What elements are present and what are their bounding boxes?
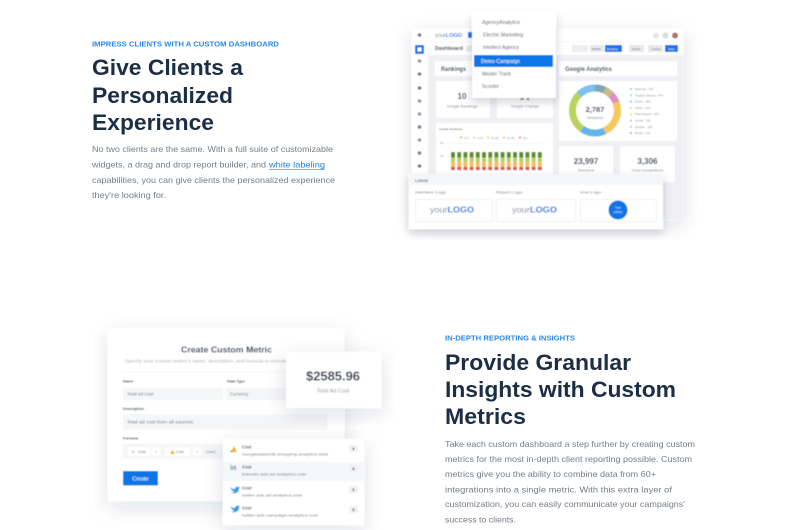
- create custom metric form: Name: [123, 380, 133, 384]
- create custom metric form: Cost: [176, 450, 185, 454]
- sessions donut chart card: [559, 81, 677, 141]
- legend: Other - 210: [635, 106, 651, 110]
- legend: Referral - 310: [635, 87, 654, 91]
- row: linkedin: linkedin-ads.ad-analytics.cost: [242, 472, 307, 476]
- create custom metric form: Data Type: [227, 380, 245, 384]
- donut chart: [572, 88, 618, 133]
- paragraph: custom metrics: metrics give you the ability to combine data from 60+: [445, 469, 656, 479]
- rankings header: Rankings: [441, 67, 467, 73]
- top bar: yourLOGO: [435, 33, 462, 39]
- paragraph: custom metrics: metrics for the most in-depth client reporting possible. Custom: [445, 454, 692, 464]
- google rankings bar chart: 25: [440, 141, 444, 145]
- row: linkedin: $: [352, 466, 355, 471]
- row: twitter campaign analytics: $: [352, 507, 355, 512]
- legend: Direct - 384: [635, 100, 651, 104]
- row: twitter campaign analytics: twitter-ads.campaign-analytics.cost: [242, 514, 319, 518]
- create button: [123, 471, 158, 486]
- heading: provide granular insights: [445, 350, 676, 429]
- google rankings bar chart: 51+: [523, 136, 528, 140]
- create custom metric form: b: [132, 449, 135, 454]
- google rankings bar chart: 4-10: [477, 136, 483, 140]
- row: linkedin: Cost: [242, 464, 252, 470]
- heading: provide granular insights: Metrics: [445, 404, 526, 429]
- paragraph: personalized experience: widgets, a drag and drop report builder, and: [91, 160, 266, 170]
- logos panel: LOGOS: [415, 179, 429, 183]
- section: personalized experience text: [91, 40, 335, 200]
- paragraph: custom metrics: success to clients.: [445, 514, 516, 524]
- heading: give clients a personalized experience: Experience: [92, 110, 214, 135]
- create custom metric form: Description: [123, 407, 145, 411]
- paragraph: custom metrics: [445, 439, 695, 524]
- create custom metric form: [108, 328, 344, 501]
- create custom metric form: +: [155, 449, 158, 454]
- paragraph: personalized experience: they're looking for.: [92, 190, 166, 200]
- google analytics header: Google Analytics: [565, 67, 613, 73]
- google rankings bar chart: 1-3: [464, 136, 469, 140]
- account dropdown: Scooter: [482, 84, 499, 90]
- paragraph: custom metrics: Take each custom dashboard a step further by creating custom: [445, 439, 695, 449]
- google rankings bar chart: Google Rankings: [439, 127, 463, 131]
- heading: provide granular insights: Insights with Custom: [445, 377, 676, 402]
- total ad cost callout: Total Ad Cost: [317, 388, 350, 394]
- paragraph: personalized experience: [91, 144, 335, 200]
- google rankings stat: 10: [458, 92, 467, 101]
- sessions stat: Sessions: [578, 168, 594, 172]
- heading: give clients a personalized experience: Personalized: [92, 83, 233, 108]
- google rankings stat: Google Rankings: [447, 104, 477, 108]
- goal completions stat: 3,306: [637, 157, 658, 166]
- google rankings stat: [436, 81, 490, 118]
- rankings header: [435, 61, 553, 76]
- google analytics header: [559, 61, 677, 76]
- total ad cost callout: $2585.96: [306, 370, 360, 384]
- account dropdown: Intellect Agency: [483, 45, 520, 51]
- row: twitter campaign analytics: [230, 506, 358, 518]
- google change stat: Google Change: [511, 104, 540, 108]
- top bar: Dashboard: [435, 46, 463, 52]
- logos panel: [409, 174, 663, 229]
- sidebar: [412, 29, 428, 175]
- row: linkedin: in: [230, 465, 236, 472]
- legend: Social - 118: [635, 118, 651, 122]
- top bar: Cancel: [651, 47, 661, 51]
- row: google ads: $: [352, 446, 355, 451]
- top bar: Mobile: [592, 47, 601, 51]
- logos panel: your LOGO: [512, 206, 557, 214]
- google change stat: [497, 81, 553, 118]
- section: granular insights text: [445, 334, 695, 524]
- row: twitter ad analytics: [230, 486, 358, 498]
- paragraph: personalized experience: capabilities, you can give clients the personalized experience: [92, 175, 335, 185]
- create custom metric form: Cost: [138, 450, 147, 454]
- logos panel: Icon Logo: [580, 190, 602, 194]
- account dropdown: [472, 12, 556, 98]
- sessions donut chart card: 2,787: [586, 105, 604, 114]
- create custom metric form: +: [196, 449, 199, 454]
- stacked bars: [451, 152, 542, 170]
- sessions stat: [559, 146, 613, 182]
- create custom metric form: Total Ad Cost: [127, 392, 154, 396]
- top bar: Delete: [632, 47, 641, 51]
- create custom metric form: Formula: [123, 436, 139, 440]
- legend: Paid Search - 312: [635, 112, 659, 116]
- top bar: Desktop: [607, 47, 618, 51]
- row: twitter campaign analytics: Cost: [242, 506, 252, 510]
- sessions stat: 23,997: [574, 157, 599, 166]
- logos panel: Your: [615, 206, 621, 210]
- heading: provide granular insights: Provide Granular: [445, 350, 631, 375]
- legend: [630, 87, 664, 135]
- account dropdown: Master Track: [482, 72, 511, 78]
- dashboard mockup: [409, 12, 683, 229]
- dashboard window: [412, 29, 683, 220]
- total ad cost callout: [286, 352, 381, 408]
- google rankings bar chart: 21-50: [507, 136, 515, 140]
- row: google ads: Googleadwords.shopping-analytics.total: [242, 452, 328, 456]
- goal completions stat: Goal Completions: [632, 168, 663, 172]
- row: google ads: Cost: [242, 444, 252, 450]
- paragraph: personalized experience: white labeling: [268, 160, 325, 170]
- create custom metric form: Currency: [230, 392, 249, 396]
- row: google ads: [230, 444, 358, 456]
- top bar: [412, 29, 683, 55]
- row: twitter ad analytics: twitter-ads.ad-analytics.cost: [242, 494, 303, 498]
- account dropdown: Electric Marketing: [483, 32, 523, 38]
- row: twitter ad analytics: $: [352, 487, 355, 492]
- goal completions stat: [620, 146, 675, 182]
- account dropdown: AgencyAnalytics: [482, 20, 521, 26]
- create custom metric form: Create Custom Metric: [181, 344, 272, 354]
- eyebrow: impress clients: IMPRESS CLIENTS WITH A CUSTOM DASHBOARD: [92, 40, 280, 48]
- legend: Email - 122: [635, 131, 651, 135]
- legend: Display - 181: [635, 125, 653, 129]
- logos panel: Report Logo: [496, 190, 523, 194]
- custom metric mockup: [108, 328, 381, 525]
- legend: Organic Search - 870: [635, 93, 664, 97]
- create custom metric form: Total ad cost from all sources: [127, 420, 194, 424]
- create custom metric form: Cost |: [206, 450, 216, 454]
- eyebrow: in-depth reporting: IN-DEPTH REPORTING & INSIGHTS: [445, 334, 575, 342]
- heading: give clients a personalized experience: [92, 55, 244, 135]
- row: linkedin: [230, 464, 358, 476]
- google rankings bar chart: [436, 123, 553, 175]
- account dropdown: Demo Campaign: [481, 59, 520, 65]
- google rankings bar chart: 11-20: [491, 136, 499, 140]
- logos panel: Interface Logo: [415, 190, 447, 194]
- paragraph: custom metrics: integrations into a single metric. With this extra layer of: [445, 484, 673, 494]
- create custom metric form: Specify your custom metric's name, description, and formula to include: [125, 358, 288, 364]
- sessions donut chart card: Sessions: [587, 115, 603, 120]
- top bar: Save: [668, 47, 675, 51]
- row: twitter ad analytics: Cost: [242, 486, 252, 490]
- create button: Create: [132, 476, 149, 482]
- paragraph: personalized experience: No two clients are the same. With a full suite of customizable: [92, 144, 333, 154]
- logos panel: yourLOGO: [430, 206, 474, 214]
- paragraph: custom metrics: customization, you can easily communicate your campaigns': [445, 499, 685, 509]
- heading: give clients a personalized experience: Give Clients a: [92, 55, 244, 80]
- google rankings bar chart: 13: [440, 154, 444, 158]
- logos panel: LOGO: [614, 210, 623, 214]
- metric source list: [223, 439, 364, 525]
